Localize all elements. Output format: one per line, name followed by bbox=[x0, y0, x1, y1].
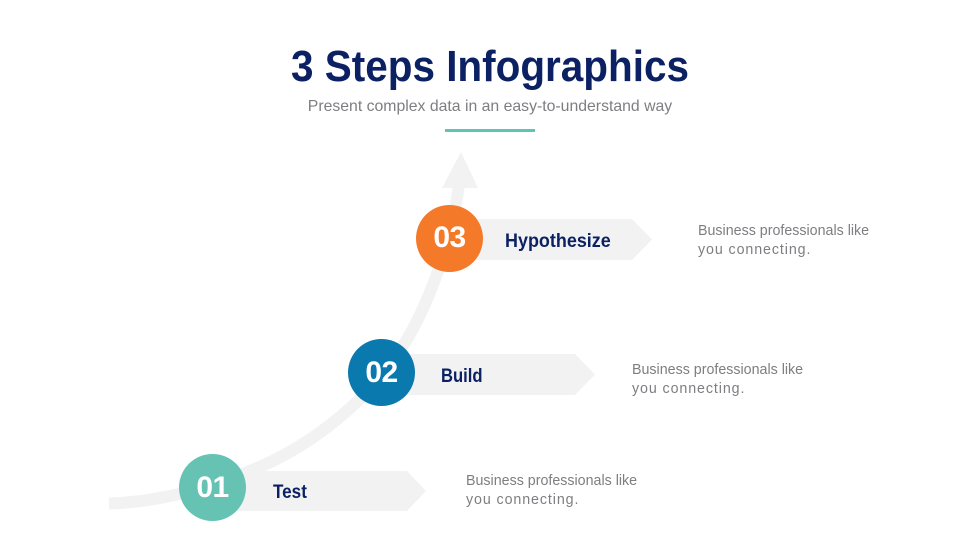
step 3 description bbox=[698, 222, 869, 258]
step 2 label: Build bbox=[441, 366, 483, 387]
step 2 description: Business professionals like bbox=[632, 360, 803, 378]
step 3 bbox=[416, 205, 869, 272]
step 1 ribbon bbox=[236, 471, 426, 511]
step 3 circle: 03 bbox=[433, 221, 466, 254]
step 3 circle bbox=[416, 205, 483, 272]
title: 3 Steps Infographics bbox=[291, 43, 689, 91]
step 1 circle: 01 bbox=[196, 471, 229, 504]
step 1 description: you connecting. bbox=[466, 491, 579, 508]
step 1 description: Business professionals like bbox=[466, 472, 637, 489]
step 3 description: you connecting. bbox=[698, 240, 811, 258]
step 1 description bbox=[466, 472, 637, 508]
step 3 ribbon bbox=[476, 219, 652, 260]
step 2 description bbox=[632, 360, 803, 396]
step 2 ribbon bbox=[406, 354, 594, 395]
step 2 bbox=[348, 339, 803, 406]
step 2 circle: 02 bbox=[365, 356, 398, 389]
step 1 label: Test bbox=[273, 482, 307, 503]
step 2 circle bbox=[348, 339, 415, 406]
step 2 description: you connecting. bbox=[632, 380, 745, 396]
step 1 circle bbox=[179, 454, 246, 521]
step 1 bbox=[179, 454, 637, 521]
subtitle: Present complex data in an easy-to-understand way bbox=[308, 98, 672, 115]
step 3 description: Business professionals like bbox=[698, 222, 869, 238]
step 3 label: Hypothesize bbox=[505, 230, 611, 252]
title underline bbox=[445, 129, 535, 132]
